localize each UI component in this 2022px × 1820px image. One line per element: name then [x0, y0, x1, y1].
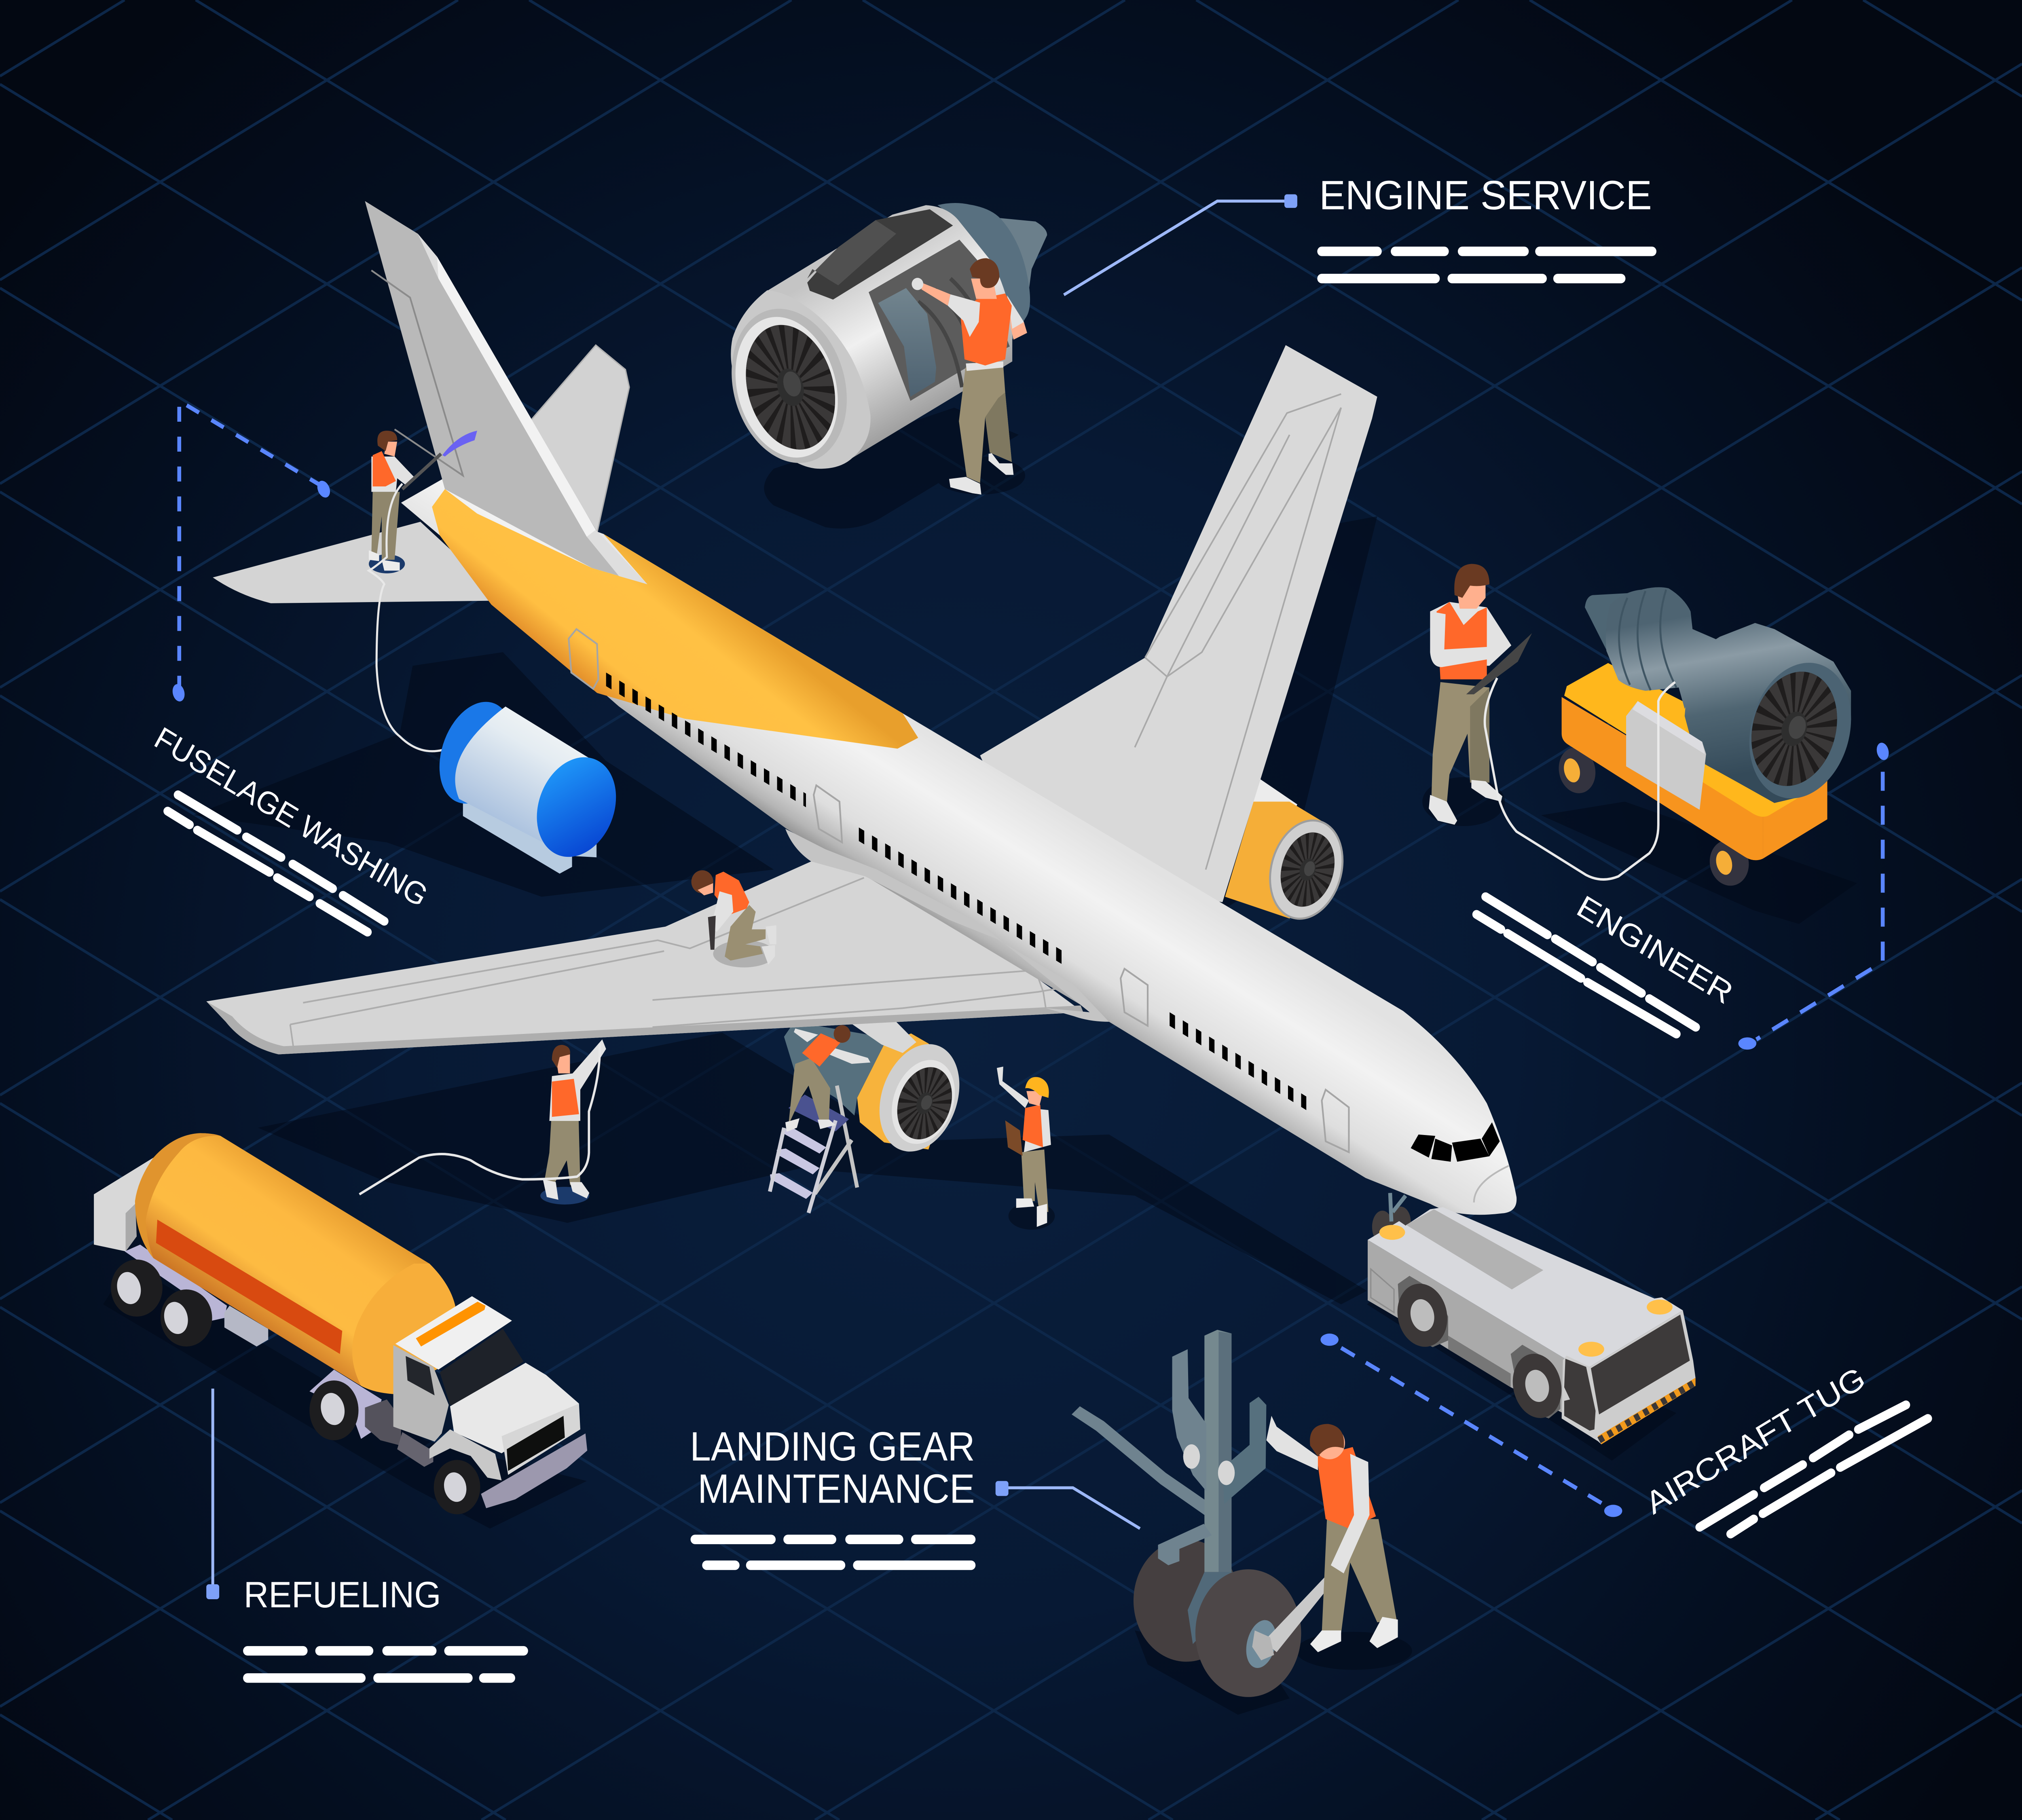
- nacelle: [1225, 802, 1334, 919]
- far wing engine: [1225, 777, 1354, 929]
- placeholder text lines: [1476, 897, 1696, 1034]
- label: refueling: [244, 1574, 524, 1678]
- person: fuselage washer: [369, 431, 477, 751]
- rear box side: [126, 1204, 137, 1251]
- worker trousers: [959, 366, 1012, 483]
- engineer head: [1456, 575, 1485, 609]
- grille: [507, 1416, 565, 1471]
- fuel hose: [360, 1044, 600, 1194]
- front fender cab: [429, 1429, 501, 1480]
- front fender: [309, 1370, 382, 1439]
- tug side: [1368, 1240, 1564, 1413]
- inner lip ring: [713, 293, 865, 479]
- dashed connector: fuselage washing: [171, 401, 332, 703]
- inspector shadow: [713, 940, 775, 967]
- front face: [501, 1404, 580, 1475]
- inspector arm: [711, 891, 733, 932]
- rear hub 1: [114, 1269, 144, 1307]
- horizontal stabilizer near: [213, 522, 506, 603]
- connector node: [1284, 194, 1297, 208]
- actuator arm: [1072, 1406, 1209, 1516]
- supervisor trousers: [1022, 1150, 1048, 1212]
- intake lip: [731, 290, 871, 469]
- tank base: [463, 795, 596, 874]
- diagnostic cable: [1485, 678, 1675, 879]
- core ring lines: [1619, 590, 1676, 690]
- heading: REFUELING: [244, 1574, 441, 1615]
- front tire 2: [434, 1460, 480, 1514]
- dashed connector: aircraft tug: [1320, 1334, 1622, 1517]
- supervisor face: [1026, 1091, 1043, 1106]
- wheel hub: [1561, 757, 1582, 784]
- tug windshield: [1591, 1315, 1690, 1414]
- connector line: [1003, 1488, 1140, 1528]
- rear tire 2: [161, 1289, 212, 1347]
- ladder platform: [789, 1095, 849, 1131]
- worker forearm: [922, 283, 950, 306]
- supervisor shirt: [1024, 1108, 1051, 1152]
- label: engine service: [1319, 172, 1652, 279]
- pivot bolt right: [1218, 1461, 1235, 1485]
- wrench: [1264, 1568, 1340, 1652]
- person: engineer with tablet: [1429, 564, 1675, 879]
- cab side: [393, 1345, 449, 1442]
- side box: [224, 1306, 268, 1347]
- tug tire 2: [1506, 1348, 1568, 1424]
- dashed line: [179, 401, 322, 686]
- engine block: [365, 1399, 401, 1446]
- person: refueling worker: [360, 1040, 606, 1205]
- mechanic arm left: [1266, 1416, 1318, 1470]
- mechanic hair: [1310, 1424, 1344, 1456]
- mechanic trousers: [789, 1058, 830, 1125]
- tug hazard stripes: [1599, 1382, 1696, 1440]
- engine exhaust cone tip: [993, 218, 1047, 299]
- wing surface: [206, 861, 1083, 1055]
- mechanic shoes: [1310, 1617, 1398, 1652]
- near nose tire: [1372, 1211, 1393, 1243]
- cart wheel rear: [1554, 743, 1600, 798]
- tail leading edge highlight: [418, 234, 647, 584]
- fan face: [1733, 649, 1867, 812]
- person: engine service worker: [912, 258, 1027, 495]
- pylon: [846, 1018, 916, 1053]
- dashed line: [1756, 772, 1883, 1040]
- cart wheel front: [1705, 835, 1753, 890]
- intake ring: [865, 1032, 974, 1164]
- worker vest: [961, 294, 1012, 366]
- rudder lines: [371, 271, 463, 476]
- worker hair: [970, 258, 999, 288]
- wing lower edge: [206, 1001, 1083, 1055]
- horizontal stabilizer far: [530, 345, 629, 533]
- wrench socket: [1252, 1630, 1274, 1660]
- worker glove: [912, 278, 923, 290]
- wing body fairing: [785, 829, 1109, 1022]
- mechanic vest: [802, 1033, 841, 1067]
- mechanic arm right: [1331, 1454, 1369, 1573]
- mechanic shoes: [785, 1118, 835, 1132]
- person: landing gear mechanic: [1266, 1416, 1398, 1652]
- wing surface: [980, 345, 1377, 902]
- heading: ENGINEER: [1571, 889, 1739, 1010]
- heading: FUSELAGE WASHING: [149, 720, 434, 913]
- far arm and hand: [1007, 296, 1027, 340]
- tank rear crescent: [135, 1133, 220, 1258]
- panel: aircraft fuselage: [401, 477, 1516, 1215]
- dashed line: [1341, 1348, 1605, 1505]
- panel: fuel truck: [94, 1133, 587, 1514]
- cab roof: [396, 1296, 512, 1370]
- connector node: [206, 1584, 219, 1599]
- nose landing gear: [1372, 1193, 1411, 1243]
- front wheel: [1195, 1569, 1301, 1697]
- rear tire 1: [111, 1260, 163, 1317]
- worker vest: [552, 1079, 579, 1117]
- side window: [406, 1356, 435, 1395]
- wheel hub front: [1713, 849, 1734, 877]
- step: [397, 1432, 433, 1467]
- washer shoes: [369, 550, 400, 571]
- windshield: [440, 1329, 524, 1405]
- heading: ENGINE SERVICE: [1319, 172, 1652, 218]
- worker far shoe: [989, 453, 1013, 475]
- ladder rear leg: [815, 1086, 857, 1194]
- wing flap lines: [290, 878, 1070, 1052]
- axle sleeve: [1188, 1572, 1234, 1644]
- hood: [450, 1363, 579, 1453]
- near wing engine: [784, 1018, 974, 1164]
- front bumper: [481, 1433, 587, 1508]
- washer shirt: [371, 457, 415, 492]
- core section: [1606, 587, 1717, 709]
- connector line: [212, 1389, 213, 1592]
- passenger door outlines: [569, 629, 1349, 1152]
- engineer shoes: [1429, 780, 1502, 825]
- end dot: [1875, 741, 1891, 761]
- dark panel lighter facet: [807, 220, 896, 285]
- spray wand: [402, 454, 441, 489]
- front hub 2: [441, 1470, 470, 1505]
- placeholder text lines: [1700, 1405, 1928, 1534]
- far sleeve: [1007, 296, 1024, 329]
- washer legs: [371, 492, 400, 560]
- fuselage body: [401, 477, 1516, 1215]
- inspector vest: [715, 872, 749, 914]
- placeholder text lines: [695, 1539, 971, 1565]
- tug hazard stripe base: [1598, 1378, 1696, 1444]
- washer hose: [369, 484, 442, 751]
- icon: fan: [1272, 825, 1343, 914]
- cart side: [1562, 697, 1763, 860]
- roof light bar: [416, 1302, 486, 1347]
- near wing: [206, 861, 1083, 1055]
- dashed connector: engineer: [1738, 741, 1891, 1050]
- engine cowl body: [732, 205, 1012, 469]
- rear chassis: [125, 1245, 227, 1323]
- tug side window: [1564, 1359, 1595, 1431]
- connector line: [1064, 201, 1290, 295]
- worker shoes: [543, 1180, 589, 1200]
- heading line 1: LANDING GEAR: [690, 1424, 975, 1469]
- torque link: [1158, 1524, 1212, 1565]
- control box: [1626, 701, 1706, 810]
- worker sleeve: [948, 294, 980, 337]
- label: fuselage washing: [149, 720, 434, 932]
- cockpit windows: [1411, 1122, 1500, 1162]
- end dot: [1320, 1334, 1339, 1346]
- label: landing gear maintenance: [690, 1424, 975, 1565]
- label: engineer: [1476, 889, 1739, 1034]
- connector: landing gear: [996, 1481, 1140, 1528]
- supervisor raised arm: [997, 1067, 1029, 1108]
- worker neck and face: [971, 279, 997, 299]
- inspector drill: [708, 916, 716, 950]
- hard hat: [1025, 1077, 1049, 1098]
- person: wing inspector: [692, 870, 776, 967]
- tug rear door: [1371, 1269, 1394, 1313]
- beacon front right: [1647, 1300, 1673, 1315]
- rear hub 2: [161, 1299, 191, 1337]
- far wing: [980, 345, 1377, 902]
- clipboard: [1005, 1120, 1023, 1156]
- worker near shoe: [949, 477, 981, 495]
- ground shadows: [103, 408, 1857, 1715]
- tug top: [1368, 1207, 1683, 1367]
- person: supervisor with clipboard: [997, 1067, 1051, 1227]
- intake ring: [1258, 810, 1354, 929]
- cart front: [1763, 777, 1827, 859]
- worker hair: [552, 1045, 570, 1068]
- nacelle: [857, 1034, 954, 1150]
- icon: fan: [887, 1059, 962, 1148]
- tug cab: [1562, 1311, 1696, 1444]
- engineer far leg shade: [1470, 687, 1489, 782]
- supervisor vest: [1023, 1105, 1043, 1147]
- tug lower band: [1448, 1336, 1511, 1387]
- tug hub 1: [1407, 1296, 1438, 1334]
- mechanic vest: [1317, 1447, 1376, 1528]
- engine dark core: [784, 1022, 884, 1116]
- engine top dark panel: [807, 209, 953, 300]
- icon: engine fan: [731, 313, 850, 462]
- label: aircraft tug: [1640, 1360, 1928, 1534]
- worker legs: [544, 1118, 580, 1185]
- tank rear cap: [426, 690, 526, 815]
- tank body: [135, 1133, 455, 1394]
- heading line 2: MAINTENANCE: [698, 1466, 975, 1511]
- pylon: [1248, 777, 1297, 822]
- end dot: [1738, 1038, 1756, 1050]
- end dot: [315, 478, 332, 500]
- mechanic arm left: [794, 1029, 818, 1042]
- panel: engine service illustration: [713, 203, 1047, 495]
- nose cone line: [1474, 1166, 1509, 1203]
- panel: engine on cart: [1554, 587, 1867, 890]
- engineer forearm: [1430, 611, 1489, 667]
- inspector hair: [692, 870, 713, 893]
- washer vest: [373, 451, 396, 486]
- tank front cap: [352, 1264, 455, 1394]
- tug wheel well 2: [1511, 1345, 1560, 1418]
- tug grille plate: [1406, 1209, 1543, 1289]
- engineer legs: [1432, 682, 1489, 803]
- mechanic head: [834, 1025, 850, 1043]
- beacon front left: [1578, 1342, 1604, 1357]
- panel: blue water tank: [426, 690, 630, 874]
- engineer shirt: [1430, 602, 1511, 666]
- control box top: [1633, 701, 1705, 754]
- connector: engine service: [1064, 194, 1297, 295]
- person: ladder mechanic: [770, 1025, 870, 1213]
- worker far leg: [985, 392, 1012, 462]
- front wheel hub: [1242, 1617, 1281, 1672]
- mechanic arm right: [829, 1047, 870, 1064]
- tank front cap: [522, 744, 630, 870]
- turbine blue casing: [878, 288, 936, 397]
- tablet: [1466, 633, 1532, 694]
- inspector face: [698, 883, 713, 895]
- windows row 3: [1170, 1019, 1306, 1103]
- center strut: [1204, 1330, 1231, 1572]
- inspector shoes: [761, 925, 776, 965]
- heading: AIRCRAFT TUG: [1640, 1360, 1871, 1521]
- end dot: [1604, 1505, 1622, 1517]
- engine exhaust collar: [937, 203, 1030, 340]
- mechanic legs: [1322, 1519, 1396, 1633]
- pivot bolt left: [1183, 1444, 1200, 1469]
- worker face: [556, 1055, 570, 1074]
- windows row 1: [606, 679, 806, 801]
- tug hub 2: [1522, 1367, 1552, 1405]
- strut shaded side: [1218, 1332, 1231, 1572]
- engineer hair: [1454, 564, 1489, 598]
- washer face: [384, 442, 397, 457]
- placeholder text lines: [168, 795, 384, 932]
- foot shadow: [540, 1187, 589, 1205]
- tug tire 1: [1391, 1278, 1454, 1353]
- rear wheel: [1134, 1539, 1239, 1662]
- fan housing: [1685, 623, 1851, 803]
- end dot: [171, 683, 186, 703]
- rear box: [94, 1158, 153, 1251]
- ladder rails: [770, 1120, 835, 1213]
- front tire 1: [309, 1380, 358, 1440]
- rear cone: [1585, 592, 1641, 658]
- panel: landing gear: [1072, 1330, 1340, 1697]
- wing flap lines: [1135, 394, 1341, 870]
- ladder steps: [770, 1128, 826, 1199]
- yellow livery: [432, 489, 918, 748]
- windows row 2: [859, 834, 1063, 958]
- shirt hem: [966, 361, 1003, 371]
- tail leading edge white strip: [437, 257, 596, 537]
- cart top: [1564, 663, 1826, 817]
- tug beacons: [1379, 1225, 1673, 1357]
- tank body: [455, 706, 589, 845]
- washer foot shadow: [369, 554, 405, 573]
- connector: refueling: [206, 1389, 219, 1599]
- opening: [880, 1050, 966, 1154]
- open bay: [869, 240, 1010, 401]
- engineer vest: [1436, 602, 1487, 679]
- placeholder text lines: [247, 1651, 524, 1678]
- panel: aircraft tug: [1368, 1207, 1696, 1444]
- nose gear strut: [1390, 1193, 1406, 1222]
- tail fin: [365, 201, 647, 584]
- water spray: [442, 431, 477, 457]
- inspector trousers: [725, 905, 766, 961]
- front hub 1: [317, 1390, 348, 1428]
- placeholder text lines: [1322, 252, 1652, 279]
- far nose tire: [1390, 1207, 1411, 1237]
- left fork: [1172, 1349, 1206, 1491]
- icon: fan: [1738, 660, 1851, 798]
- right fork: [1223, 1397, 1266, 1504]
- worker shirt: [549, 1040, 606, 1121]
- mechanic head: [1314, 1427, 1345, 1459]
- vertical tail: [365, 201, 647, 584]
- tug wheel well 1: [1398, 1276, 1448, 1347]
- beacon rear: [1379, 1225, 1405, 1240]
- washer hair: [377, 431, 397, 451]
- tank red band: [156, 1220, 342, 1354]
- connector node: [996, 1481, 1009, 1496]
- supervisor shoes: [1016, 1199, 1047, 1227]
- intake opening: [719, 303, 854, 471]
- turbine rings: [918, 279, 993, 387]
